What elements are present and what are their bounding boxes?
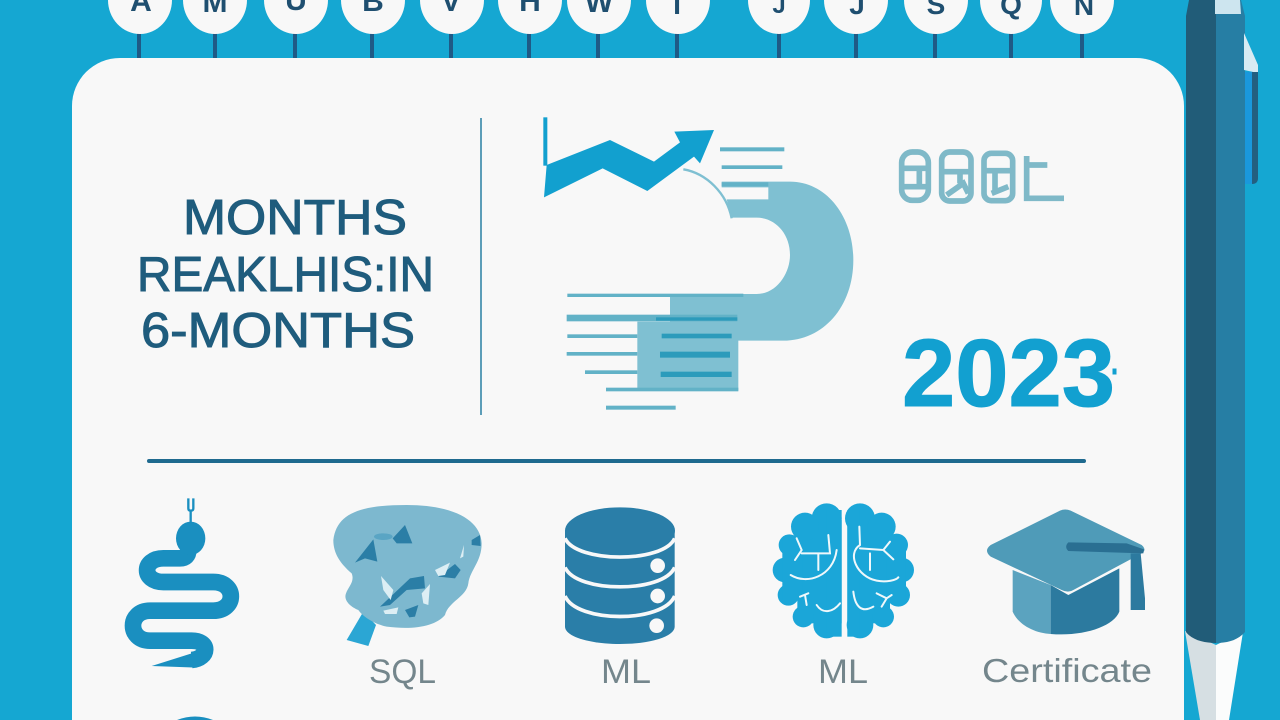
- tab M: [183, 0, 247, 58]
- cap top board: [987, 509, 1144, 592]
- heading line 3: 6-MONTHS: [141, 304, 415, 358]
- snake head: [176, 522, 205, 555]
- label: ML brain: ML: [818, 653, 868, 691]
- blob mid patch: [374, 533, 393, 540]
- snake tail: [152, 653, 197, 668]
- blob stem: [347, 612, 376, 646]
- glyph 4: [1027, 156, 1064, 198]
- icon: brain: [773, 503, 914, 638]
- cloud edge: [683, 169, 732, 218]
- cap base right: [1051, 568, 1119, 634]
- icon: SQL data map blob: [333, 505, 482, 646]
- tab B: [341, 0, 405, 58]
- glyph 2: [942, 152, 971, 201]
- pen clip: [1244, 33, 1258, 184]
- chart illustration: cloud, document and rising arrow: [543, 117, 853, 410]
- tab U: [264, 0, 328, 58]
- blob light slivers: [381, 545, 464, 614]
- glyph 3: [984, 153, 1013, 201]
- snake body: [133, 545, 231, 660]
- tab J first: [748, 0, 810, 58]
- vertical divider: [480, 118, 482, 415]
- label: ML database: ML: [601, 653, 651, 691]
- blob body: [333, 505, 482, 628]
- glyph 1: [902, 152, 928, 200]
- heading line 1: MONTHS: [183, 191, 407, 245]
- garbled year marker: [902, 152, 1064, 201]
- rising arrow: [544, 130, 714, 197]
- tab V: [420, 0, 484, 58]
- tab Q: [980, 0, 1042, 58]
- tab N: [1050, 0, 1114, 58]
- heading line 2: REAKLHIS:IN: [137, 248, 434, 302]
- label: Certificate: Certificate: [982, 652, 1152, 689]
- pen barrel: [1186, 0, 1245, 643]
- pen: [1185, 0, 1258, 720]
- tab J second: [824, 0, 888, 58]
- cloud and document shape: [637, 182, 853, 391]
- pen tip: [1185, 631, 1243, 720]
- cap tassel: [1066, 542, 1145, 610]
- tab T: [646, 0, 710, 58]
- brain veins: [791, 527, 898, 611]
- year 2023: [902, 320, 1116, 427]
- year digits: 2023: [902, 320, 1115, 427]
- panel: white notebook card: [72, 58, 1184, 720]
- database bands: [565, 538, 675, 616]
- brain left hemisphere: [773, 503, 842, 638]
- cap base left: [1013, 570, 1051, 634]
- text lines: [567, 147, 784, 410]
- tab S: [904, 0, 968, 58]
- horizontal divider: [147, 459, 1086, 463]
- binder tabs row: [108, 0, 1114, 58]
- database dots: [649, 558, 665, 633]
- icon: graduation cap: [987, 509, 1145, 634]
- brain right hemisphere: [845, 503, 914, 638]
- clipped bottom icon: [177, 716, 213, 720]
- blob dark patches: [355, 525, 481, 617]
- year tick mark: [1113, 369, 1116, 374]
- tab W: [567, 0, 631, 58]
- tab H: [498, 0, 562, 58]
- database body: [565, 531, 675, 644]
- icon: python snake: [133, 498, 231, 668]
- snake tongue: [188, 498, 193, 523]
- tab A: [108, 0, 172, 58]
- label: SQL: SQL: [369, 653, 436, 691]
- heading: [137, 191, 434, 358]
- document rows: [656, 317, 737, 377]
- icon: database: [565, 507, 675, 644]
- database top: [565, 507, 675, 554]
- chart axis: [543, 117, 547, 166]
